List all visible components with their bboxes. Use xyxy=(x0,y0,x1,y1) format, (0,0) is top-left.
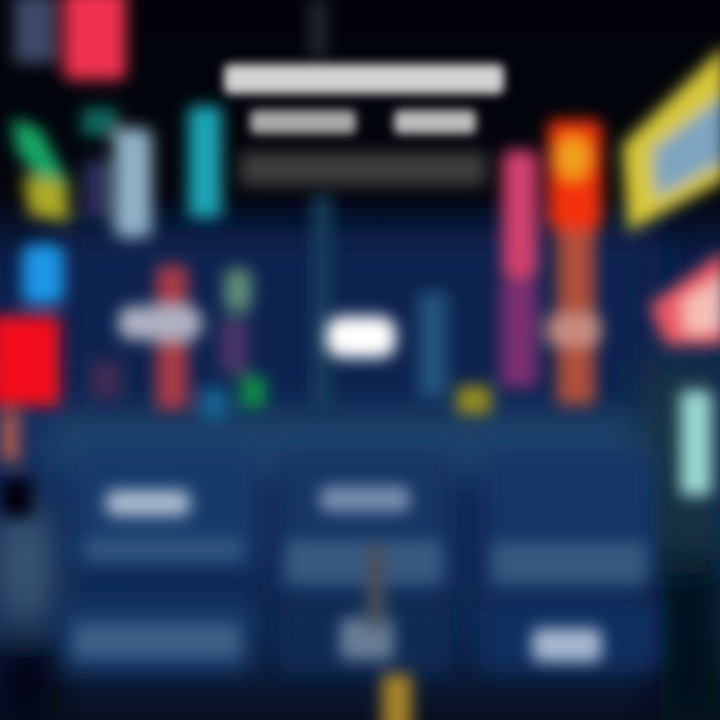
sign: grey top left xyxy=(14,0,56,63)
sign: teal small xyxy=(82,108,118,136)
card heading: right xyxy=(532,628,602,662)
sign: yellow small xyxy=(457,386,491,414)
sign: pink xyxy=(502,150,538,280)
sign: yellow xyxy=(22,176,70,222)
card body: row 2 left xyxy=(74,624,240,658)
sign: teal xyxy=(188,106,222,218)
sign: blue xyxy=(22,244,64,304)
sign: orange red xyxy=(548,120,602,230)
card body: row 1 left xyxy=(86,538,242,560)
sign: green xyxy=(12,118,72,190)
sign: muted red xyxy=(90,360,122,400)
card body: row 1 middle xyxy=(286,540,442,584)
card body: row 1 right xyxy=(492,542,646,584)
central pole xyxy=(310,0,448,410)
title line 2 right xyxy=(394,110,476,134)
sign: pale band xyxy=(118,306,202,340)
street haze xyxy=(0,230,720,720)
central white callout xyxy=(326,316,396,358)
sign: dim purple xyxy=(84,160,108,218)
sign: peach edge xyxy=(0,412,20,462)
sign: yellow angled xyxy=(622,45,720,232)
sign: bright red xyxy=(0,316,60,406)
sign: green bright xyxy=(240,376,266,408)
sign: blue small xyxy=(200,388,228,420)
card heading: middle xyxy=(320,486,410,512)
card body: row 2 middle xyxy=(340,618,394,660)
title line 2 left xyxy=(250,110,356,134)
card: row 2 left xyxy=(62,600,252,672)
card: row 2 right xyxy=(480,600,660,672)
sign: coral xyxy=(650,250,720,345)
road line xyxy=(366,545,386,630)
road marking xyxy=(382,674,412,720)
sign: pale teal xyxy=(680,390,712,496)
signs: left side xyxy=(0,0,266,516)
subtitle xyxy=(240,152,486,186)
card: row 1 middle xyxy=(280,450,450,590)
card: row 2 middle xyxy=(280,600,450,672)
sign: purple column xyxy=(220,318,248,374)
card text blurs xyxy=(74,486,646,720)
card grid xyxy=(62,450,660,672)
title line 1 xyxy=(224,64,504,94)
sign: red column xyxy=(156,265,188,410)
sign: orange column xyxy=(557,230,595,405)
sign: pale blue xyxy=(114,128,152,238)
signs: right side xyxy=(457,45,720,496)
card: row 1 right xyxy=(485,450,655,590)
title block xyxy=(224,64,504,134)
card heading: left xyxy=(106,490,190,516)
card: row 1 left xyxy=(72,450,257,570)
sign: red top left xyxy=(64,0,126,80)
sign: green small xyxy=(224,268,252,312)
